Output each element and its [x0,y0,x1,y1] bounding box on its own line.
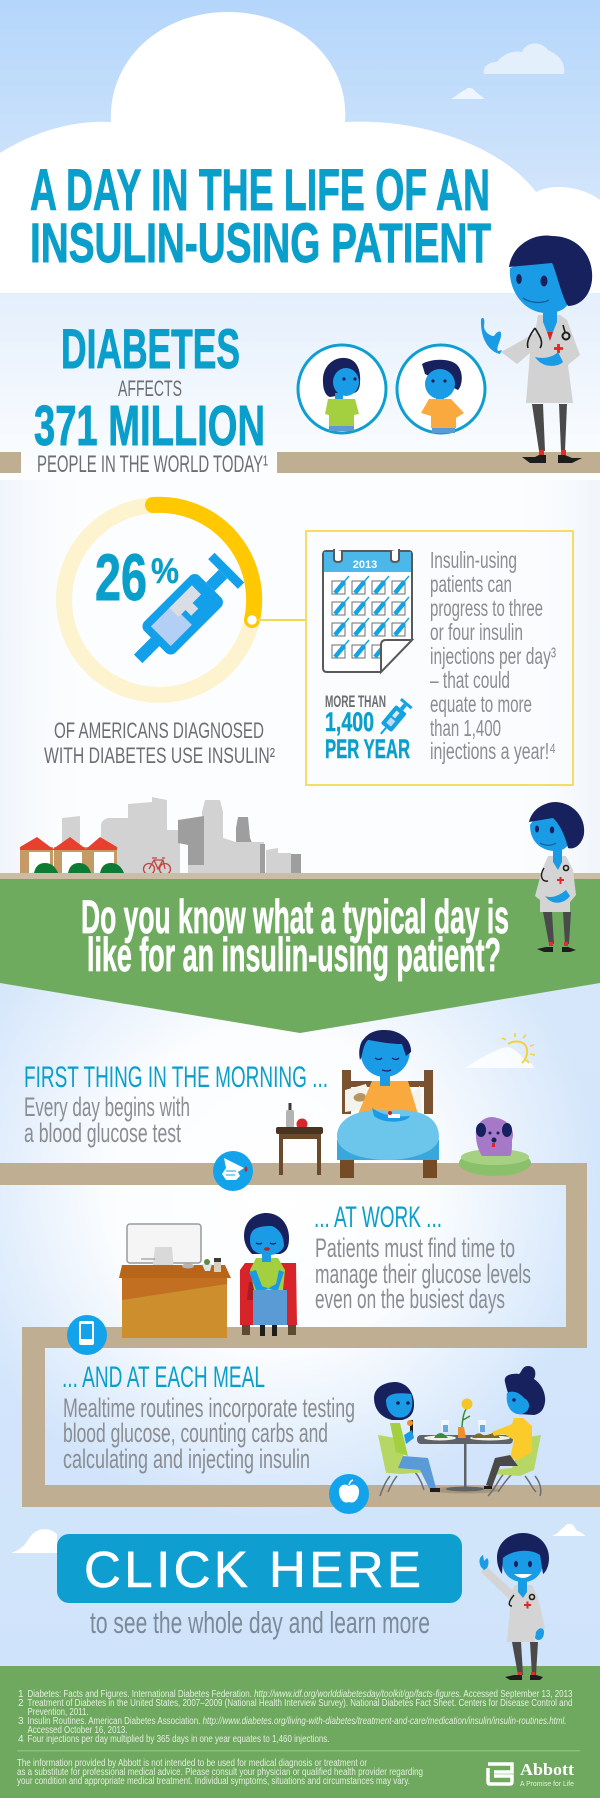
text: injection progression: equate to more [430,691,532,717]
green banner [0,879,600,1033]
woman at desk in chair [240,1213,297,1336]
disclaimer: The information provided by Abbott is not intended to be used for medical diagnosis or treatment or [17,1758,368,1769]
ring chart: 26 percent [64,505,258,695]
footnotes: 2 [18,1698,24,1709]
step: at each meal: blood glucose, counting carbs and [63,1418,328,1448]
footnotes: 3 [18,1716,24,1727]
caption: Americans using insulin [44,718,275,768]
step: at each meal: Mealtime routines incorporate testing [63,1393,355,1423]
step: first thing in the morning: Every day begins with [24,1092,190,1122]
footnotes: 1 [18,1689,24,1700]
statistic: diabetes affects 371 million: PEOPLE IN THE WORLD TODAY¹ [37,451,268,478]
statistic: more than 1,400 per year [325,692,410,764]
houses [20,837,124,873]
step: at each meal: calculating and injecting insulin [63,1444,310,1474]
statistic: more than 1,400 per year: PER YEAR [325,734,410,764]
icon: small syringe [375,698,413,738]
step: first thing in the morning: a blood glucose test [24,1118,181,1148]
small cloud left of button [11,1529,57,1553]
small cloud top right [484,43,564,74]
footnotes [18,1689,573,1745]
panel: injections per year [306,531,573,785]
small cloud right of button [552,1524,585,1536]
statistic: more than 1,400 per year: 1,400 [325,707,374,737]
icon: calendar [323,549,412,672]
text: injection progression: than 1,400 [430,715,501,741]
disclaimer: as a substitute for professional medical advice. Please consult your physician or qualified health provider regarding [17,1767,423,1778]
ground strip [0,873,600,879]
connector line [258,619,306,621]
text: injection progression: – that could [430,667,510,693]
icon: phone [67,1315,107,1355]
man in bed testing blood [337,1030,439,1178]
footnotes: Prevention, 2011. [28,1707,88,1718]
icon: finger prick [213,1151,253,1191]
disclaimer [17,1758,423,1787]
icon: man in circle [397,345,485,433]
disclaimer: your condition and appropriate medical treatment. Individual symptoms, situations and circumstances may vary. [17,1776,410,1787]
footnotes: 4 [18,1734,24,1745]
large white cloud behind title [0,12,600,293]
text: injection progression: patients can [430,571,512,597]
footnotes: Accessed October 16, 2013. [28,1725,128,1736]
step: first thing in the morning [24,1061,328,1148]
call to action button: CLICK HERE [84,1541,421,1598]
bedside table with bottle and apple [276,1103,323,1175]
statistic: more than 1,400 per year: MORE THAN [325,692,386,711]
text: injection progression: progress to three [430,595,543,621]
doctor character [481,236,592,463]
ground strip with statistic [0,452,600,473]
Abbott logo: A Promise for Life [520,1779,574,1788]
icon: calendar: 2013 [353,559,377,571]
banner heading [81,890,509,981]
statistic: 26%: 26 [95,540,147,614]
footnotes: Diabetes: Facts and Figures. International Diabetes Federation. http://www.idf.org/worlddiabetesday/toolkit/gp/facts-figures. Accessed September 13, 2013 [28,1689,573,1700]
call to action button [57,1534,462,1603]
diners at table [374,1366,545,1496]
text: injection progression [430,547,556,764]
dog on cushion [459,1117,531,1176]
statistic: diabetes affects 371 million: 371 MILLION [34,394,265,458]
step: at each meal: ... AND AT EACH MEAL [62,1361,265,1394]
statistic: diabetes affects 371 million [34,317,268,478]
tan winding path [0,1163,600,1507]
statistic: diabetes affects 371 million: AFFECTS [118,376,182,401]
icon: sun with faint cloud [465,1033,535,1068]
city skyline [62,797,301,873]
icon: apple [329,1474,369,1514]
footnotes: Four injections per day multiplied by 365 days in one year equates to 1,460 injections. [28,1734,330,1745]
footer divider [17,1750,580,1752]
caption: Americans using insulin: OF AMERICANS DIAGNOSED [54,718,264,743]
caption: Americans using insulin: WITH DIABETES USE INSULIN² [44,743,275,768]
doctor character standing on banner [529,802,584,952]
step: at work: ... AT WORK ... [314,1201,442,1234]
text: injection progression: Insulin-using [430,547,517,573]
footer background [0,1666,600,1798]
step: first thing in the morning: FIRST THING IN THE MORNING ... [24,1061,328,1094]
waving doctor character [480,1533,549,1680]
desk with computer [119,1224,231,1338]
Abbott logo [488,1760,574,1788]
Abbott logo: Abbott [520,1760,574,1779]
step: at each meal [62,1361,355,1474]
call to action caption: to see the whole day and learn more [90,1605,430,1640]
title [30,158,491,274]
icon: bicycle [144,858,170,874]
statistic: 26%: % [151,552,179,591]
small cloud [451,88,484,99]
icon: woman in circle [298,345,386,433]
step: at work [314,1201,531,1314]
text: injection progression: or four insulin [430,619,523,645]
statistic: diabetes affects 371 million: DIABETES [61,317,240,380]
icon: syringe [123,552,245,674]
